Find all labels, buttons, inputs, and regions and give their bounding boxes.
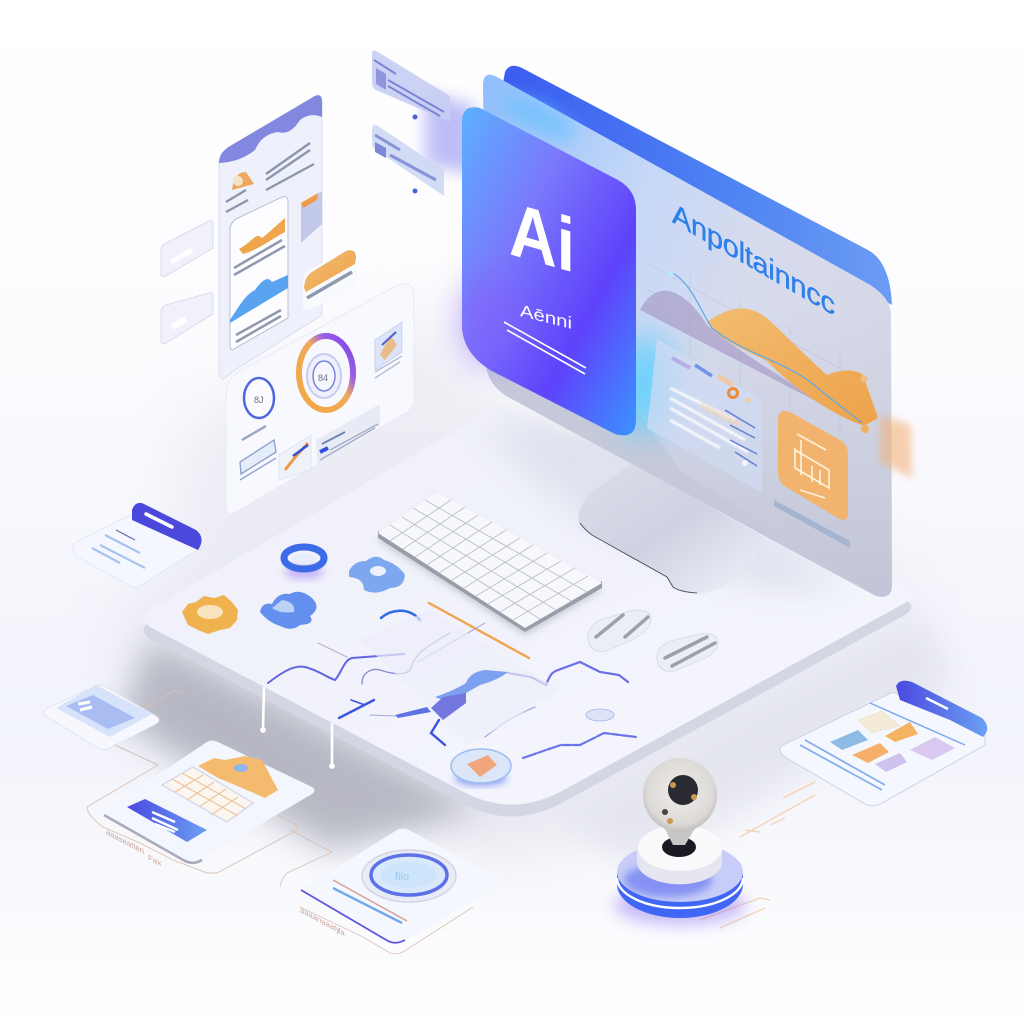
- monitor: [483, 66, 912, 597]
- small orange keyboard: [162, 767, 253, 822]
- glass oval on desk: [586, 709, 614, 721]
- white drip connectors: [261, 687, 334, 768]
- connector line: [290, 830, 332, 852]
- data blob: [360, 610, 560, 745]
- mouse 1: [588, 610, 651, 652]
- keyboard: [378, 492, 602, 635]
- inner chart card: [230, 197, 288, 350]
- thumb illustration: [375, 322, 402, 378]
- monitor screen face: [483, 75, 892, 597]
- handwritten caption 2b: fa: [338, 925, 345, 938]
- blue disc: [617, 842, 743, 918]
- lower bezel: [486, 330, 876, 596]
- handwritten caption 1: aaaseatten: [106, 827, 144, 856]
- thumbnails: [830, 711, 955, 772]
- lower mini chart: [279, 435, 311, 480]
- floating card 2: [372, 125, 444, 196]
- monitor stand: [578, 463, 763, 593]
- mice: [588, 610, 718, 672]
- blue header chip: [127, 799, 207, 842]
- Ai logo text: Ai: [509, 186, 575, 290]
- screen title: Anpoltainncc: [672, 196, 835, 323]
- lower right list: [316, 404, 380, 465]
- handwritten caption 2: aaaanaaaty: [300, 905, 341, 935]
- donut gauge: [299, 336, 353, 410]
- lamp device: [614, 758, 746, 925]
- screen glow: [498, 87, 675, 435]
- small ring gauge: [244, 378, 274, 418]
- desk circuit lines: [268, 603, 636, 758]
- AI panel: [462, 107, 636, 435]
- orange glass edge: [880, 415, 912, 478]
- donut gauge: 84: [318, 373, 328, 383]
- small ring gauge: 8J: [254, 395, 264, 405]
- handwritten caption 1b: Fax: [148, 852, 162, 868]
- bottom-left keyboard card: [87, 740, 314, 873]
- base glow: [614, 885, 746, 925]
- left floating note card: [72, 503, 202, 588]
- orange note chip: [303, 250, 357, 310]
- footer bar: [774, 500, 850, 548]
- header bars: [226, 143, 314, 212]
- glass chip on desk: [451, 749, 511, 785]
- chart icon tile: [778, 411, 848, 520]
- purple glass glow: [425, 92, 475, 175]
- floating card 1: [372, 50, 450, 122]
- floating cards top: [372, 50, 450, 196]
- monitor back rim: [500, 66, 892, 305]
- white cylinder: [637, 848, 722, 884]
- orange block: [198, 756, 278, 798]
- wavy header: [219, 95, 322, 163]
- side chip: [301, 191, 322, 243]
- right thumbnails card: [780, 681, 987, 806]
- bottom ring card: [280, 828, 502, 954]
- panel caption: Aēnni: [520, 300, 572, 333]
- glass bulb: [643, 758, 717, 845]
- glowing ring: fiio: [395, 871, 409, 883]
- glowing ring: [362, 850, 456, 902]
- icon: blue flower: [260, 592, 317, 629]
- icon: blue puzzle blob: [349, 557, 405, 593]
- orange circuit traces: [700, 782, 815, 928]
- chart grid: [648, 265, 865, 435]
- desk surface: [144, 405, 912, 817]
- tall floating phone card: [219, 95, 322, 379]
- lower left widget: [240, 426, 276, 480]
- mouse 2: [657, 634, 718, 672]
- small floating chips: [161, 221, 213, 344]
- blue header tab: [896, 681, 987, 737]
- dashboard card: [226, 284, 414, 514]
- icon: orange gear: [182, 595, 238, 634]
- data table panel: [647, 339, 762, 493]
- chart areas: [640, 270, 878, 433]
- bottom-left small blue card: [43, 685, 183, 765]
- icon: blue ring: [284, 547, 324, 579]
- pie mini icon: [232, 172, 254, 190]
